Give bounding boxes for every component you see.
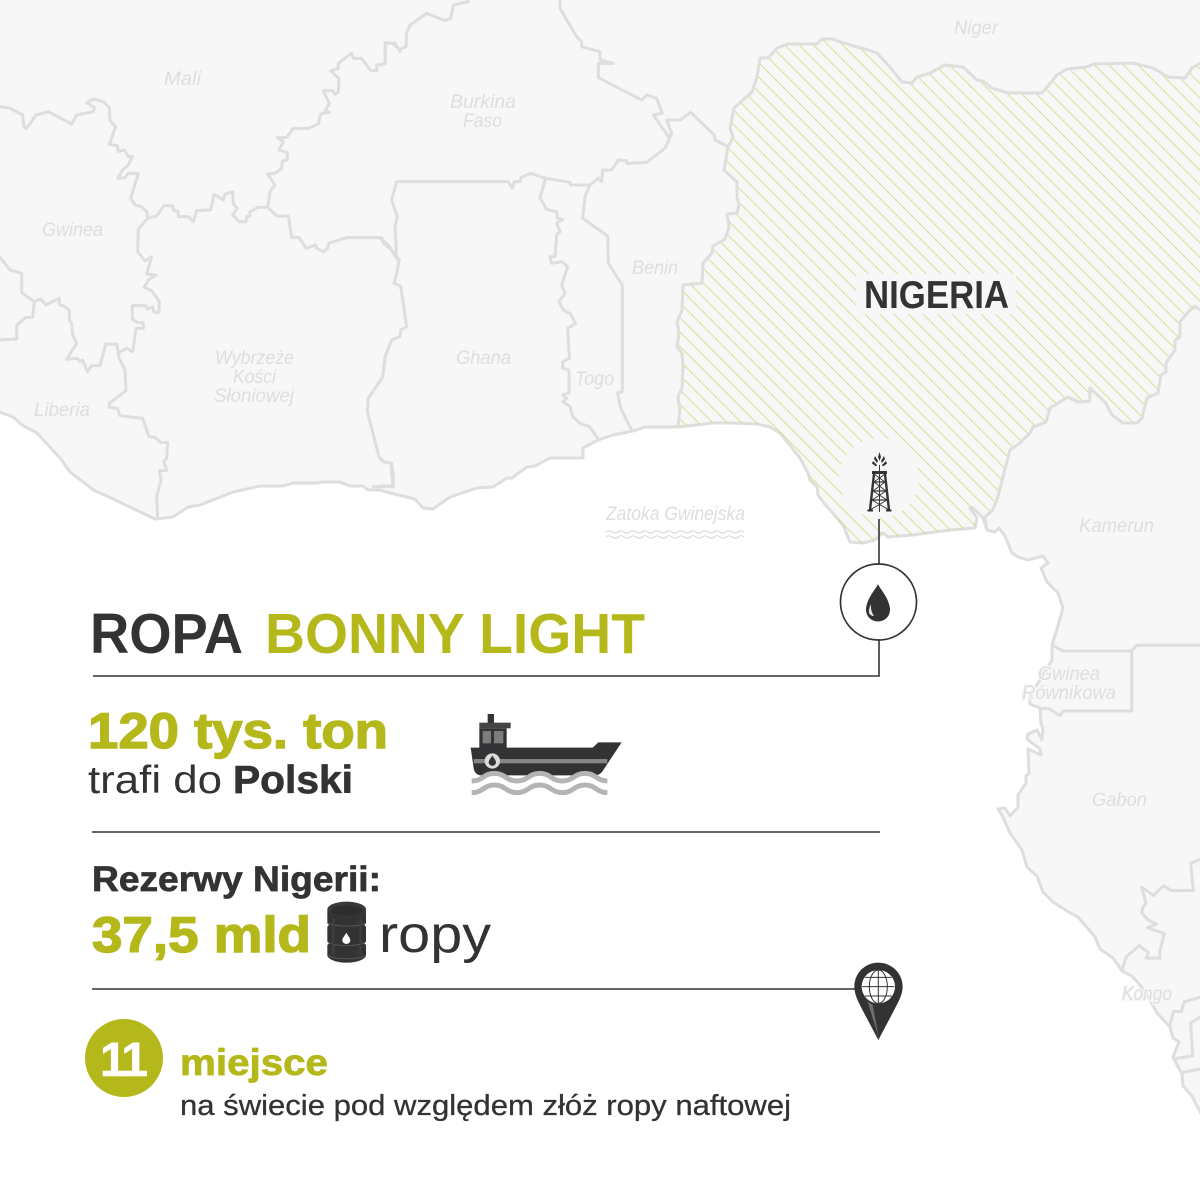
icon: oil barrel (327, 902, 366, 963)
Gulf of Guinea label with waves (605, 504, 745, 538)
country labels: Gwinea (42, 220, 103, 241)
country labels (34, 18, 1172, 1005)
stat: 120 thousand tons (88, 703, 388, 802)
stat: Nigerian reserves (92, 860, 491, 964)
country borders: central Africa (1040, 645, 1200, 1072)
country labels: Gabon (1092, 790, 1147, 811)
country labels: Burkina (450, 92, 516, 113)
country labels: Mali (164, 69, 202, 90)
icon: location pin with globe (854, 963, 903, 1040)
country labels: Kamerun (1079, 516, 1154, 537)
stat: Nigerian reserves: ropy (379, 906, 491, 964)
country labels: Togo (575, 369, 614, 390)
country labels: Wybrzeże (215, 348, 294, 369)
country labels: Ghana (456, 348, 511, 369)
icon: oil drop in circle (840, 564, 916, 640)
stat: world rank (180, 1042, 791, 1122)
label: Nigeria: NIGERIA (864, 274, 1009, 317)
country borders: centre (380, 0, 728, 486)
Gulf of Guinea label with waves: Zatoka Gwinejska (605, 504, 745, 525)
country labels: Faso (463, 111, 502, 132)
stat: world rank: miejsce (180, 1042, 328, 1083)
country labels: Równikowa (1022, 683, 1116, 704)
country labels: Kości (233, 367, 277, 388)
title: ROPA (90, 602, 243, 666)
stat: 120 thousand tons: 120 tys. ton (88, 703, 388, 759)
stat: Nigerian reserves: Rezerwy Nigerii: (92, 860, 381, 899)
country labels: Liberia (34, 400, 90, 421)
country labels: Kongo (1122, 984, 1172, 1005)
Nigeria hatched area (677, 39, 1200, 543)
country labels: Gwinea (1038, 664, 1100, 685)
connector: derrick to drop (878, 519, 880, 565)
stat: world rank: na świecie pod względem złóż ropy naftowej (180, 1090, 791, 1122)
badge: rank 11 (85, 1019, 163, 1097)
stat: 120 thousand tons: trafi do (88, 759, 222, 802)
stat: 120 thousand tons: Polski (233, 759, 353, 802)
country labels: Benin (632, 258, 678, 279)
country borders: west (0, 43, 400, 519)
country labels: Słoniowej (214, 386, 295, 407)
rule (92, 831, 880, 833)
rule (92, 988, 856, 990)
country labels: Niger (954, 18, 999, 39)
stat: Nigerian reserves: 37,5 mld (92, 907, 311, 963)
icon: tanker ship (471, 714, 622, 793)
icon: oil derrick (868, 452, 892, 512)
title highlight: BONNY LIGHT (265, 602, 645, 666)
badge: rank 11: 11 (100, 1034, 148, 1087)
connector: drop to title rule (93, 640, 879, 676)
